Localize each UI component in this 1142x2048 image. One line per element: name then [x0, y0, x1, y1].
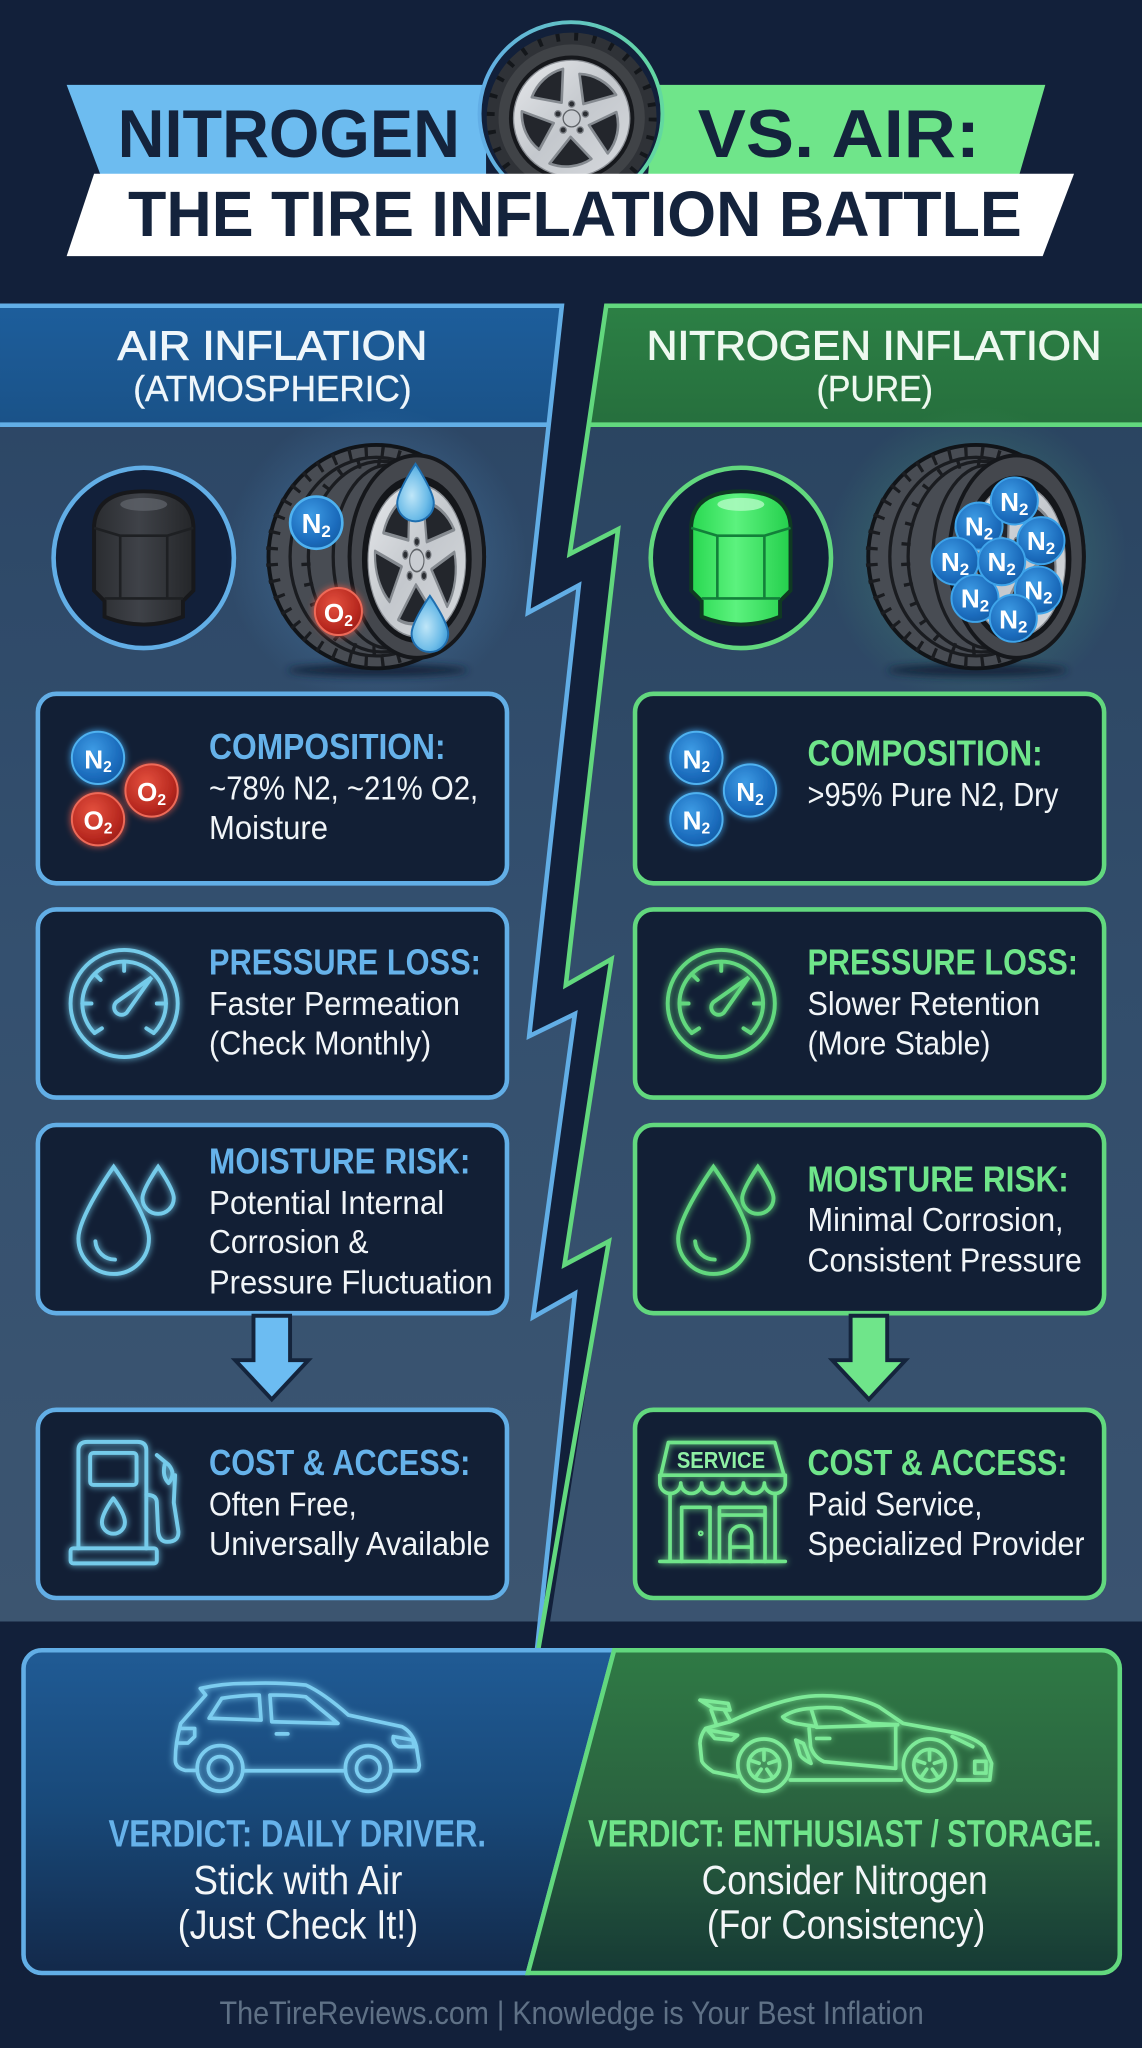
molecule: O2 — [315, 588, 362, 635]
text: composition: Moisture — [209, 810, 328, 847]
nitrogen molecule cluster: 2 — [960, 560, 969, 579]
text: composition: COMPOSITION: — [807, 733, 1043, 774]
heading: air inflation: AIR INFLATION — [118, 322, 427, 368]
text: pressure loss: Slower Retention — [807, 986, 1040, 1023]
icon: hatchback car — [175, 1683, 419, 1791]
nitrogen molecule cluster: 2 — [1019, 500, 1028, 519]
text: cost and access: Often Free, — [209, 1487, 357, 1524]
nitrogen molecule cluster: N — [1024, 576, 1043, 606]
banner: blue — [67, 85, 486, 175]
icon: air molecules: 2 — [104, 821, 113, 838]
text: pressure loss: (More Stable) — [807, 1025, 990, 1062]
heading: nitrogen inflation — [647, 322, 1101, 409]
nitrogen molecule cluster: 2 — [1046, 539, 1055, 558]
text: moisture risk: Minimal Corrosion, — [807, 1202, 1064, 1239]
nitrogen molecule cluster: N — [1027, 526, 1046, 556]
heading: nitrogen inflation: (PURE) — [817, 368, 933, 409]
heading: air inflation — [118, 322, 427, 409]
card: nitrogen composition — [635, 694, 1104, 883]
heading: nitrogen inflation: NITROGEN INFLATION — [647, 322, 1101, 368]
text: verdict nitrogen — [588, 1813, 1101, 1947]
panel header: air — [0, 304, 562, 425]
title banner — [67, 22, 1074, 256]
title line 1 right: VS. AIR: — [698, 96, 980, 172]
arrow: air — [235, 1316, 308, 1399]
text: cost and access: COST & ACCESS: — [807, 1442, 1068, 1483]
icon: black valve cap — [54, 468, 234, 648]
nitrogen molecule cluster: 2 — [1018, 617, 1027, 636]
icon: nitrogen molecules — [670, 732, 776, 845]
title line 1 left: NITROGEN — [118, 96, 460, 172]
icon: nitrogen molecules: 2 — [702, 821, 711, 838]
icon: gauge — [71, 950, 178, 1057]
text: verdict air: Stick with Air — [193, 1857, 402, 1903]
title line 2: THE TIRE INFLATION BATTLE — [128, 178, 1022, 250]
text: pressure loss: PRESSURE LOSS: — [807, 942, 1078, 983]
footer: TheTireReviews.com | Knowledge is Your Best Inflation — [220, 1994, 924, 2031]
icon: air molecules: 2 — [103, 759, 112, 776]
text: moisture risk: Potential Internal — [209, 1185, 444, 1222]
panel: air inflation — [0, 304, 579, 1649]
text: composition — [807, 733, 1059, 814]
icon: service shop — [660, 1443, 785, 1561]
text: pressure loss: (Check Monthly) — [209, 1025, 431, 1062]
text: composition: >95% Pure N2, Dry — [807, 777, 1059, 814]
nitrogen molecule cluster: 2 — [1006, 560, 1016, 579]
icon: green valve cap — [651, 468, 831, 648]
card: air composition — [38, 694, 507, 883]
icon: fuel pump — [71, 1442, 178, 1563]
icon: air molecules: O — [137, 777, 157, 807]
molecule: N2 — [290, 497, 342, 549]
nitrogen molecule cluster: 2 — [1043, 589, 1053, 608]
text: cost and access: COST & ACCESS: — [209, 1442, 470, 1483]
icon: nitrogen molecules: N — [736, 777, 755, 807]
text: pressure loss: PRESSURE LOSS: — [209, 942, 481, 983]
card: nitrogen pressure loss — [635, 909, 1104, 1098]
icon: air molecules: 2 — [157, 792, 166, 809]
nitrogen molecule cluster: N — [961, 584, 980, 614]
verdict: nitrogen side — [528, 1650, 1120, 1973]
molecule: O2: O — [324, 598, 344, 628]
text: verdict air: VERDICT: DAILY DRIVER. — [108, 1813, 486, 1855]
water drop upper — [397, 464, 434, 521]
molecule: N2: N — [302, 508, 321, 539]
icon: title tire — [480, 22, 662, 205]
icon: service shop: SERVICE — [677, 1447, 765, 1473]
icon: air tire — [226, 406, 527, 707]
text: pressure loss — [807, 942, 1078, 1062]
text: moisture risk: Consistent Pressure — [807, 1242, 1082, 1279]
icon: gauge — [668, 950, 775, 1057]
icon: nitrogen tire — [826, 406, 1126, 707]
text: moisture risk: MOISTURE RISK: — [209, 1140, 470, 1181]
text: pressure loss: Faster Permeation — [209, 986, 460, 1023]
icon: nitrogen molecules: 2 — [755, 792, 764, 809]
panel: nitrogen inflation — [538, 304, 1142, 1649]
panel header: nitrogen — [589, 304, 1142, 425]
icon: air molecules: O — [83, 806, 104, 836]
nitrogen molecule cluster: N — [1000, 487, 1019, 517]
water drop lower — [412, 596, 448, 652]
text: cost and access — [807, 1442, 1085, 1563]
icon: water drops — [678, 1167, 774, 1274]
text: cost and access — [209, 1442, 490, 1563]
verdict: air side — [24, 1650, 614, 1973]
heading: air inflation: (ATMOSPHERIC) — [133, 368, 412, 409]
nitrogen molecule cluster: N — [988, 547, 1006, 577]
icon: nitrogen molecules: N — [683, 744, 702, 774]
icon: air molecules — [72, 732, 178, 845]
text: moisture risk — [209, 1140, 493, 1302]
banner: white — [67, 174, 1074, 256]
text: moisture risk: Corrosion & — [209, 1224, 368, 1261]
card: nitrogen cost — [635, 1410, 1104, 1598]
text: composition: COMPOSITION: — [209, 726, 446, 767]
molecule: N2: 2 — [321, 522, 331, 541]
icon: sports car — [700, 1696, 992, 1791]
panel: verdict — [24, 1650, 1120, 1973]
arrow: nitrogen — [832, 1316, 905, 1399]
molecule: O2: 2 — [344, 613, 353, 630]
text: verdict nitrogen: (For Consistency) — [707, 1901, 985, 1947]
nitrogen molecule cluster: N — [999, 604, 1018, 634]
nitrogen molecule cluster: 2 — [980, 596, 989, 615]
text: composition — [209, 726, 478, 847]
text: pressure loss — [209, 942, 481, 1062]
nitrogen molecule cluster: N — [941, 547, 960, 577]
nitrogen molecule cluster: N — [965, 512, 984, 542]
banner: green — [648, 85, 1045, 175]
icon: nitrogen molecules: 2 — [702, 759, 711, 776]
icon: water drops — [78, 1167, 174, 1274]
card: air moisture risk — [38, 1125, 507, 1313]
text: cost and access: Universally Available — [209, 1526, 490, 1563]
card: nitrogen moisture risk — [635, 1125, 1104, 1313]
card: air pressure loss — [38, 909, 507, 1098]
nitrogen molecule cluster: 2 — [984, 525, 993, 544]
text: verdict air: (Just Check It!) — [178, 1901, 418, 1947]
icon: air molecules: N — [84, 744, 103, 774]
text: moisture risk — [807, 1159, 1082, 1279]
text: moisture risk: MOISTURE RISK: — [807, 1159, 1069, 1200]
icon: nitrogen molecules: N — [683, 806, 702, 836]
text: cost and access: Paid Service, — [807, 1487, 983, 1524]
text: verdict nitrogen: Consider Nitrogen — [702, 1857, 988, 1903]
nitrogen molecule cluster — [931, 477, 1065, 642]
card: air cost — [38, 1410, 507, 1598]
text: composition: ~78% N2, ~21% O2, — [209, 771, 478, 808]
text: verdict air — [108, 1813, 486, 1947]
text: cost and access: Specialized Provider — [807, 1526, 1085, 1563]
text: moisture risk: Pressure Fluctuation — [209, 1265, 493, 1302]
